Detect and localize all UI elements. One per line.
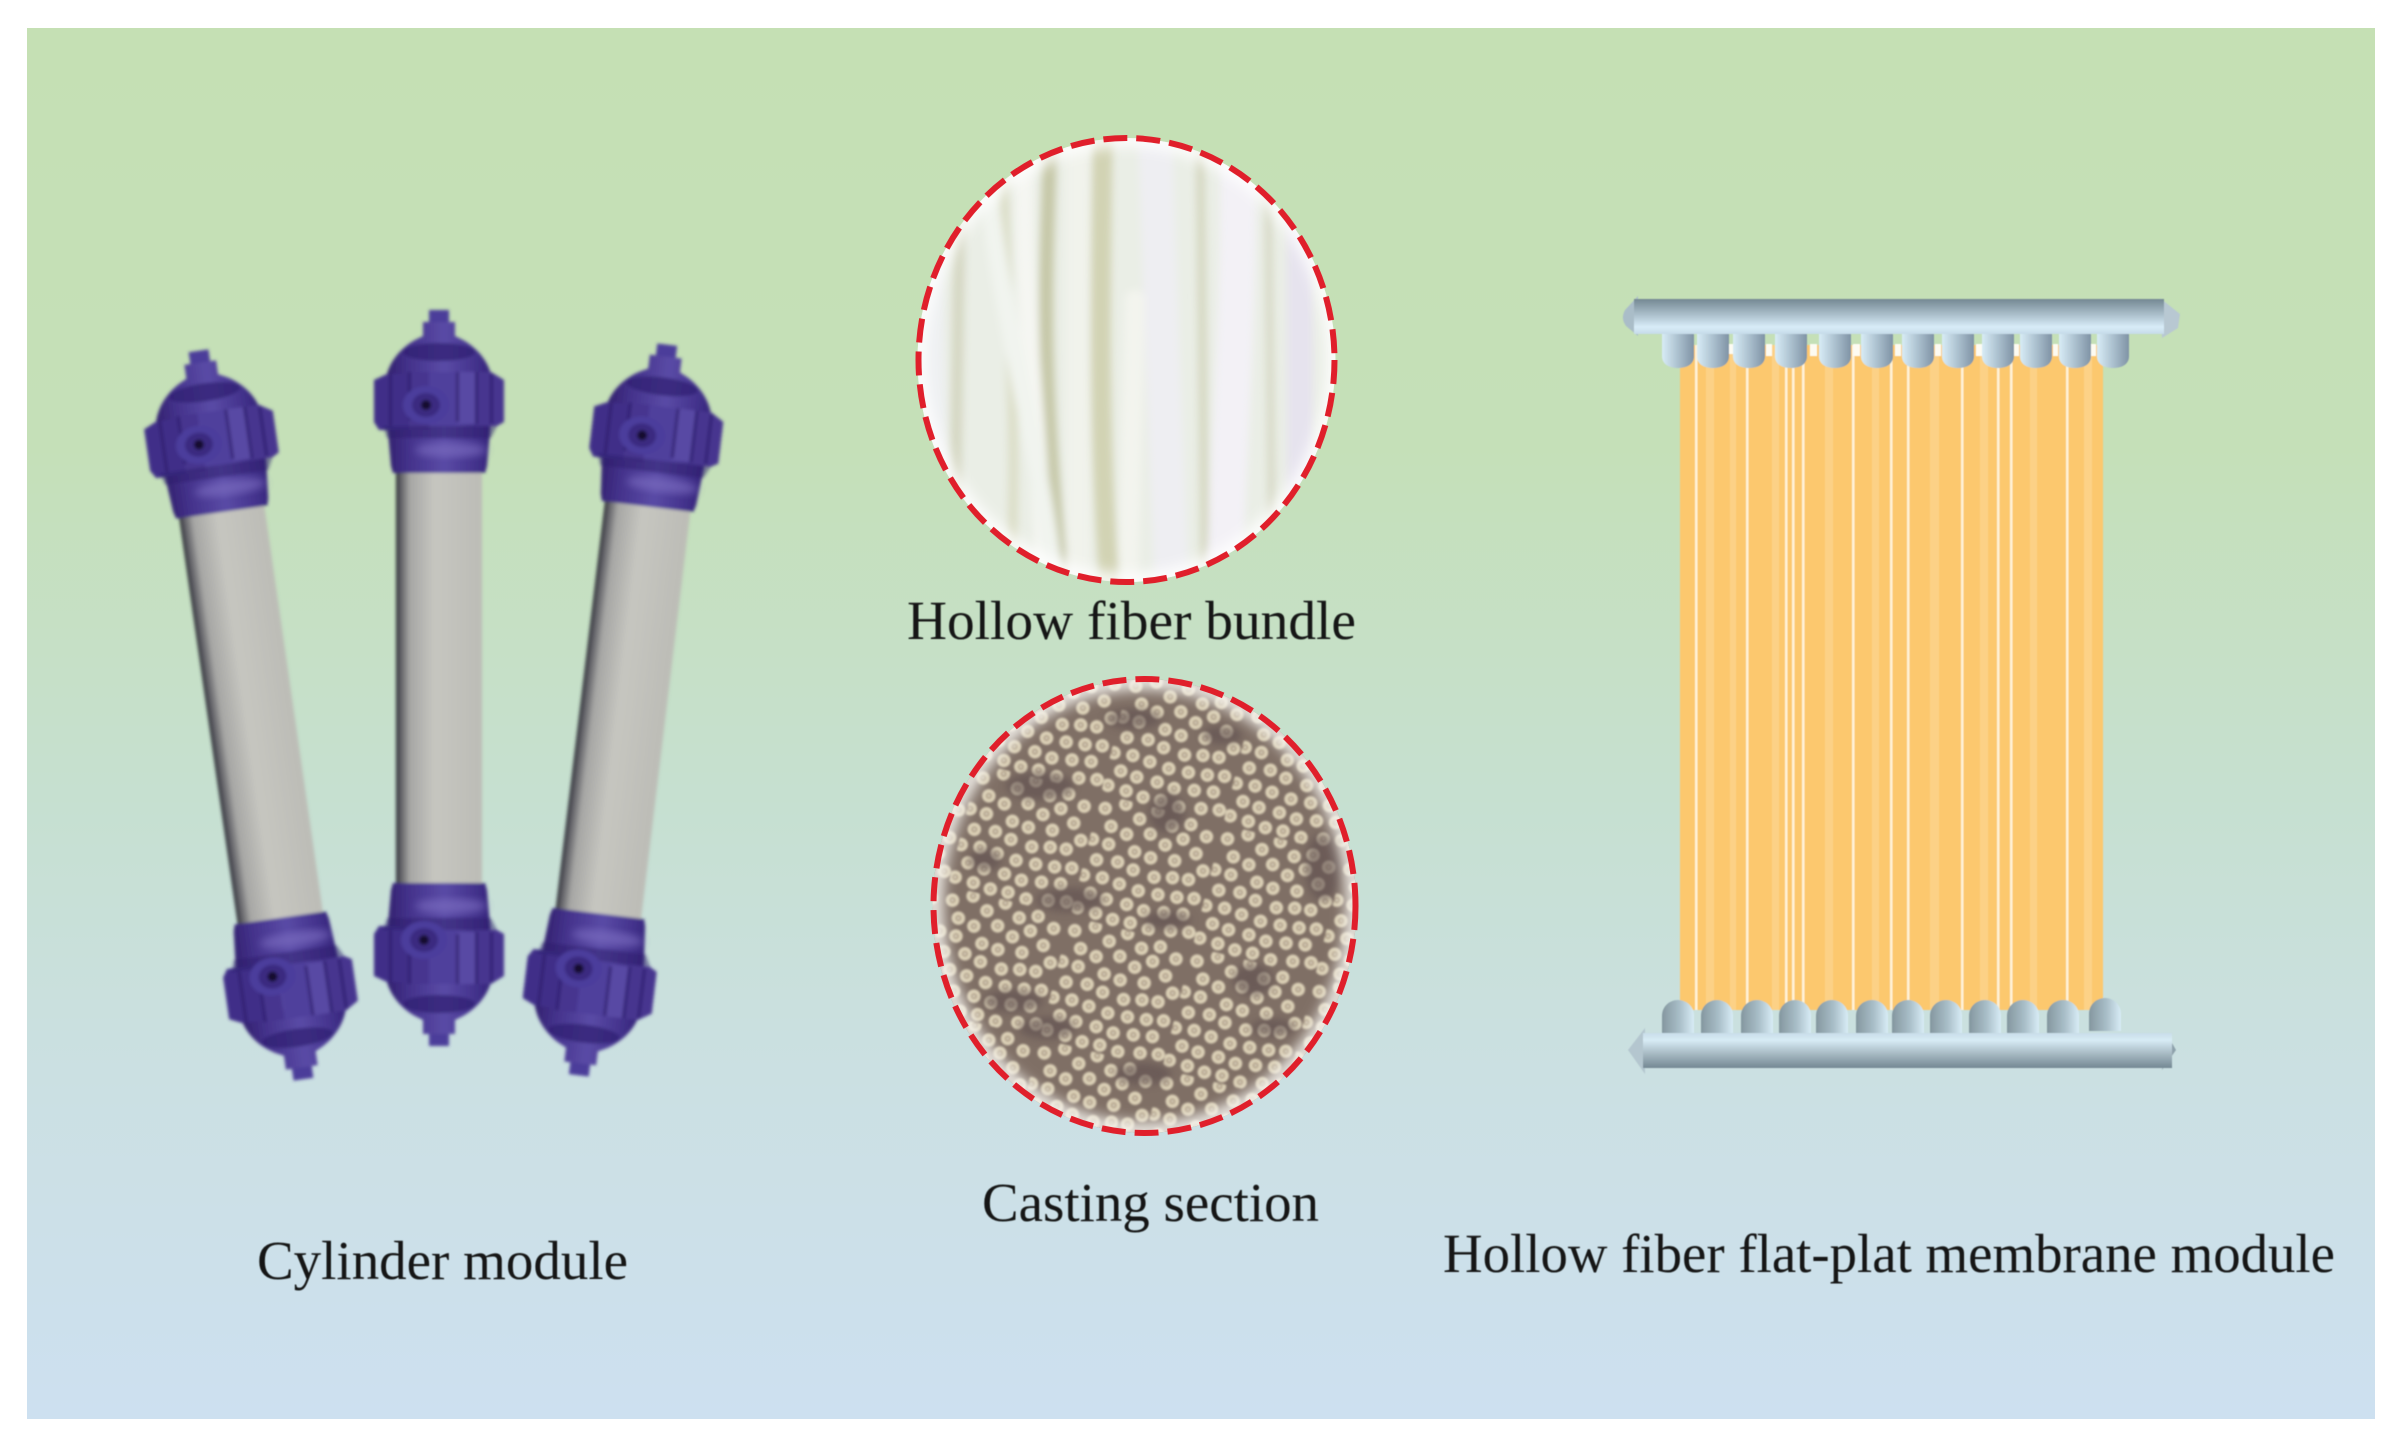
label: cylinder module: Cylinder module [257,1230,628,1291]
module: middle cylinder [374,310,504,1046]
label: hollow fiber bundle: Hollow fiber bundle [907,590,1356,651]
fiber sheet [1680,345,2103,1010]
dashed outline: bundle [918,138,1334,582]
label: casting section: Casting section [982,1172,1319,1233]
panel: hollow fiber bundle [916,135,1338,585]
label: flat-plate module: Hollow fiber flat-plat membrane module [1443,1223,2335,1284]
panel: casting section [920,670,1370,1140]
top header pipe [1623,296,2180,368]
panel: flat-plate membrane module [1623,296,2180,1074]
dashed outline: casting [934,679,1356,1133]
bottom header pipe [1628,998,2176,1074]
panel: cylinder modules [134,310,732,1089]
module: right cylinder [514,337,732,1083]
module: left cylinder [134,341,368,1089]
photo: fiber cross-sections [920,670,1370,1140]
photo: fiber strands [918,138,1336,582]
